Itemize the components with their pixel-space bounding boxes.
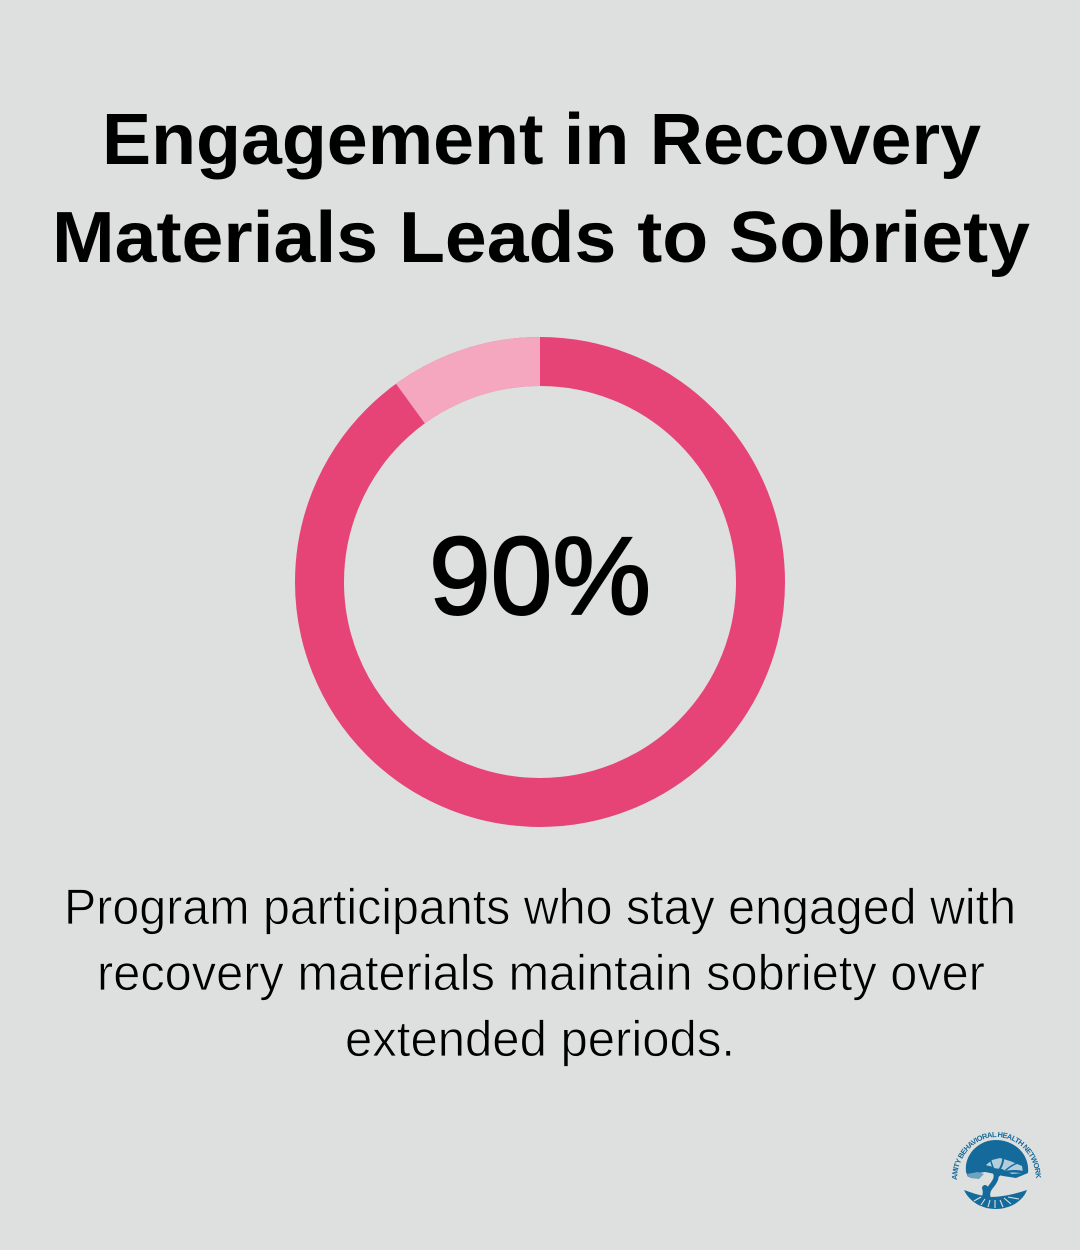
logo canopy highlights (986, 1158, 1023, 1174)
title: Materials Leads to Sobriety (52, 198, 1030, 278)
logo left foliage (967, 1172, 984, 1179)
description text (64, 879, 1016, 1067)
logo root gaps (974, 1197, 1019, 1208)
logo tree trunk and branches (985, 1155, 1022, 1197)
description text: Program participants who stay engaged with (64, 879, 1016, 935)
logo: Amity Behavioral Health Network (952, 1132, 1042, 1209)
logo roots bowl (964, 1190, 1027, 1209)
donut chart: 90 percent (320, 361, 760, 802)
logo circular name: AMITY BEHAVIORAL HEALTH NETWORK (952, 1132, 1042, 1180)
title (52, 100, 1030, 278)
donut value: 90% (429, 515, 651, 638)
description text: recovery materials maintain sobriety over (97, 945, 985, 1001)
logo tree canopy (966, 1140, 1028, 1178)
description text: extended periods. (345, 1011, 735, 1067)
title: Engagement in Recovery (102, 100, 981, 180)
